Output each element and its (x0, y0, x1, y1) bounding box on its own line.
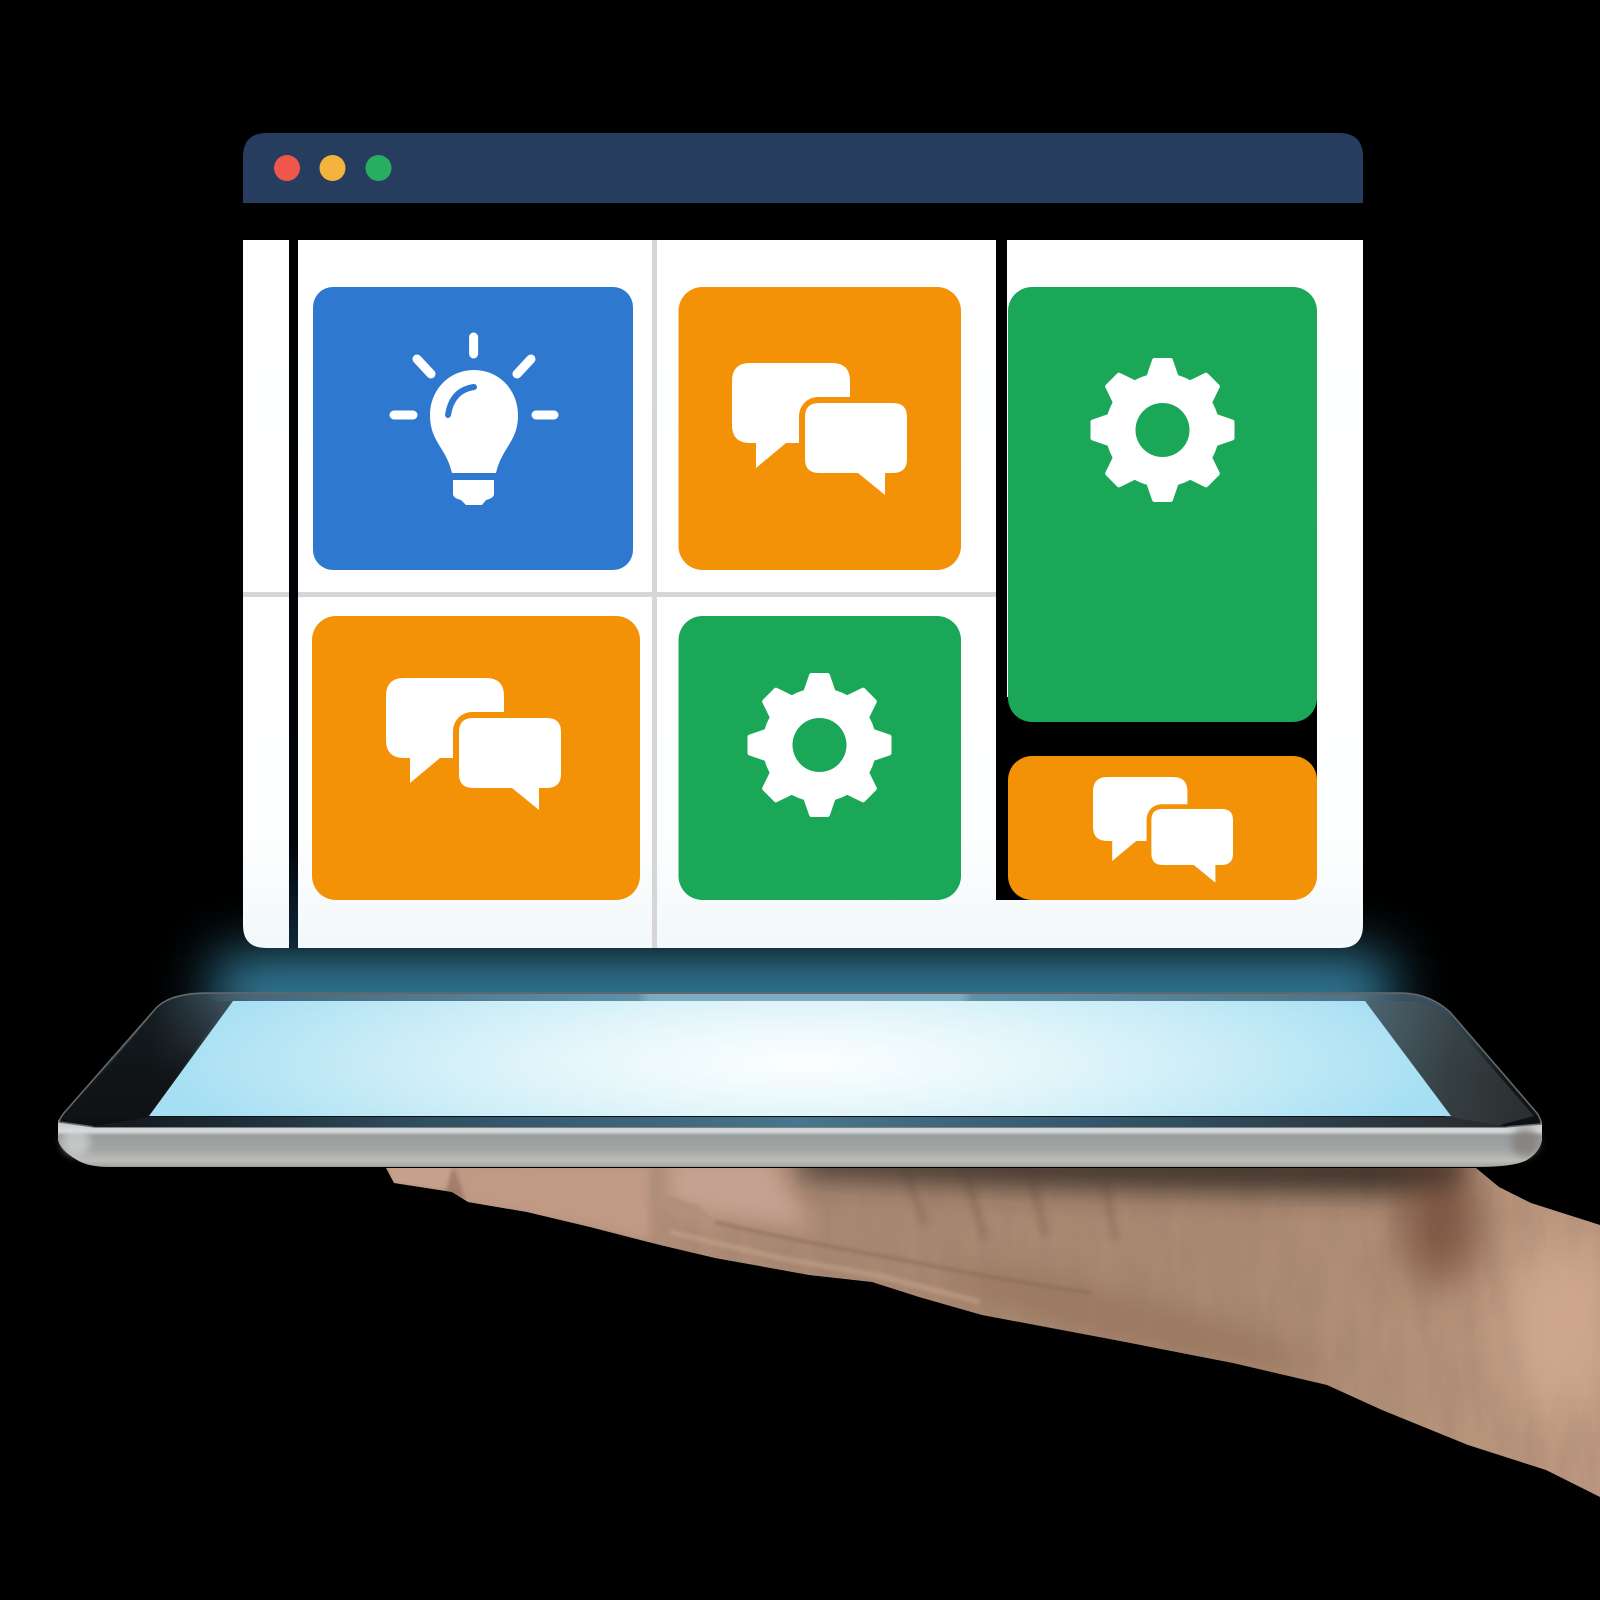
icon: chat bubbles (1093, 777, 1238, 883)
tablet glowing screen (149, 1001, 1451, 1116)
hologram glow above tablet (215, 955, 1390, 1030)
left bezel shade (66, 994, 233, 1118)
bottom bezel strip (90, 1117, 1510, 1127)
window title bar (243, 133, 1363, 203)
top bezel strip (207, 994, 1403, 1001)
browser window (243, 133, 1363, 948)
tile: chat small (1008, 756, 1317, 900)
wrist crease shadow (1406, 1165, 1474, 1285)
fingers (390, 1168, 453, 1188)
icon: chat bubbles (732, 363, 913, 495)
left black divider (289, 240, 298, 948)
palm tone (963, 1268, 1300, 1373)
window content panel (243, 240, 1363, 948)
hand (380, 1150, 1600, 1505)
horizontal grid line (243, 592, 996, 597)
tablet silver edge (58, 1118, 1542, 1167)
thumb crease (715, 1222, 1091, 1293)
right column black backing (996, 240, 1317, 900)
right bezel tone (1365, 1001, 1534, 1125)
tile: settings lower (678, 616, 961, 900)
thumb (663, 1168, 808, 1232)
hand streaks (910, 1186, 1118, 1240)
tile: settings tall (1008, 287, 1317, 722)
icon: light bulb (394, 337, 554, 505)
shadow under tablet (800, 1150, 1470, 1195)
tablet top surface (59, 993, 1541, 1127)
vertical grid line (652, 240, 657, 948)
left edge highlight (62, 1128, 90, 1156)
skin grain (1304, 1204, 1573, 1465)
right edge tone (1511, 1127, 1539, 1157)
red window dot (274, 155, 300, 181)
icon: chat bubbles (386, 678, 567, 810)
icon: gear (750, 676, 889, 814)
knuckle folds (670, 1232, 980, 1302)
tablet (58, 993, 1542, 1167)
tile: chat top (678, 287, 961, 570)
tile: idea (313, 287, 633, 570)
wrist highlight (1510, 1240, 1600, 1420)
yellow window dot (320, 155, 346, 181)
icon: gear (1093, 360, 1232, 500)
tile: chat lower left (312, 616, 640, 900)
green window dot (366, 155, 392, 181)
